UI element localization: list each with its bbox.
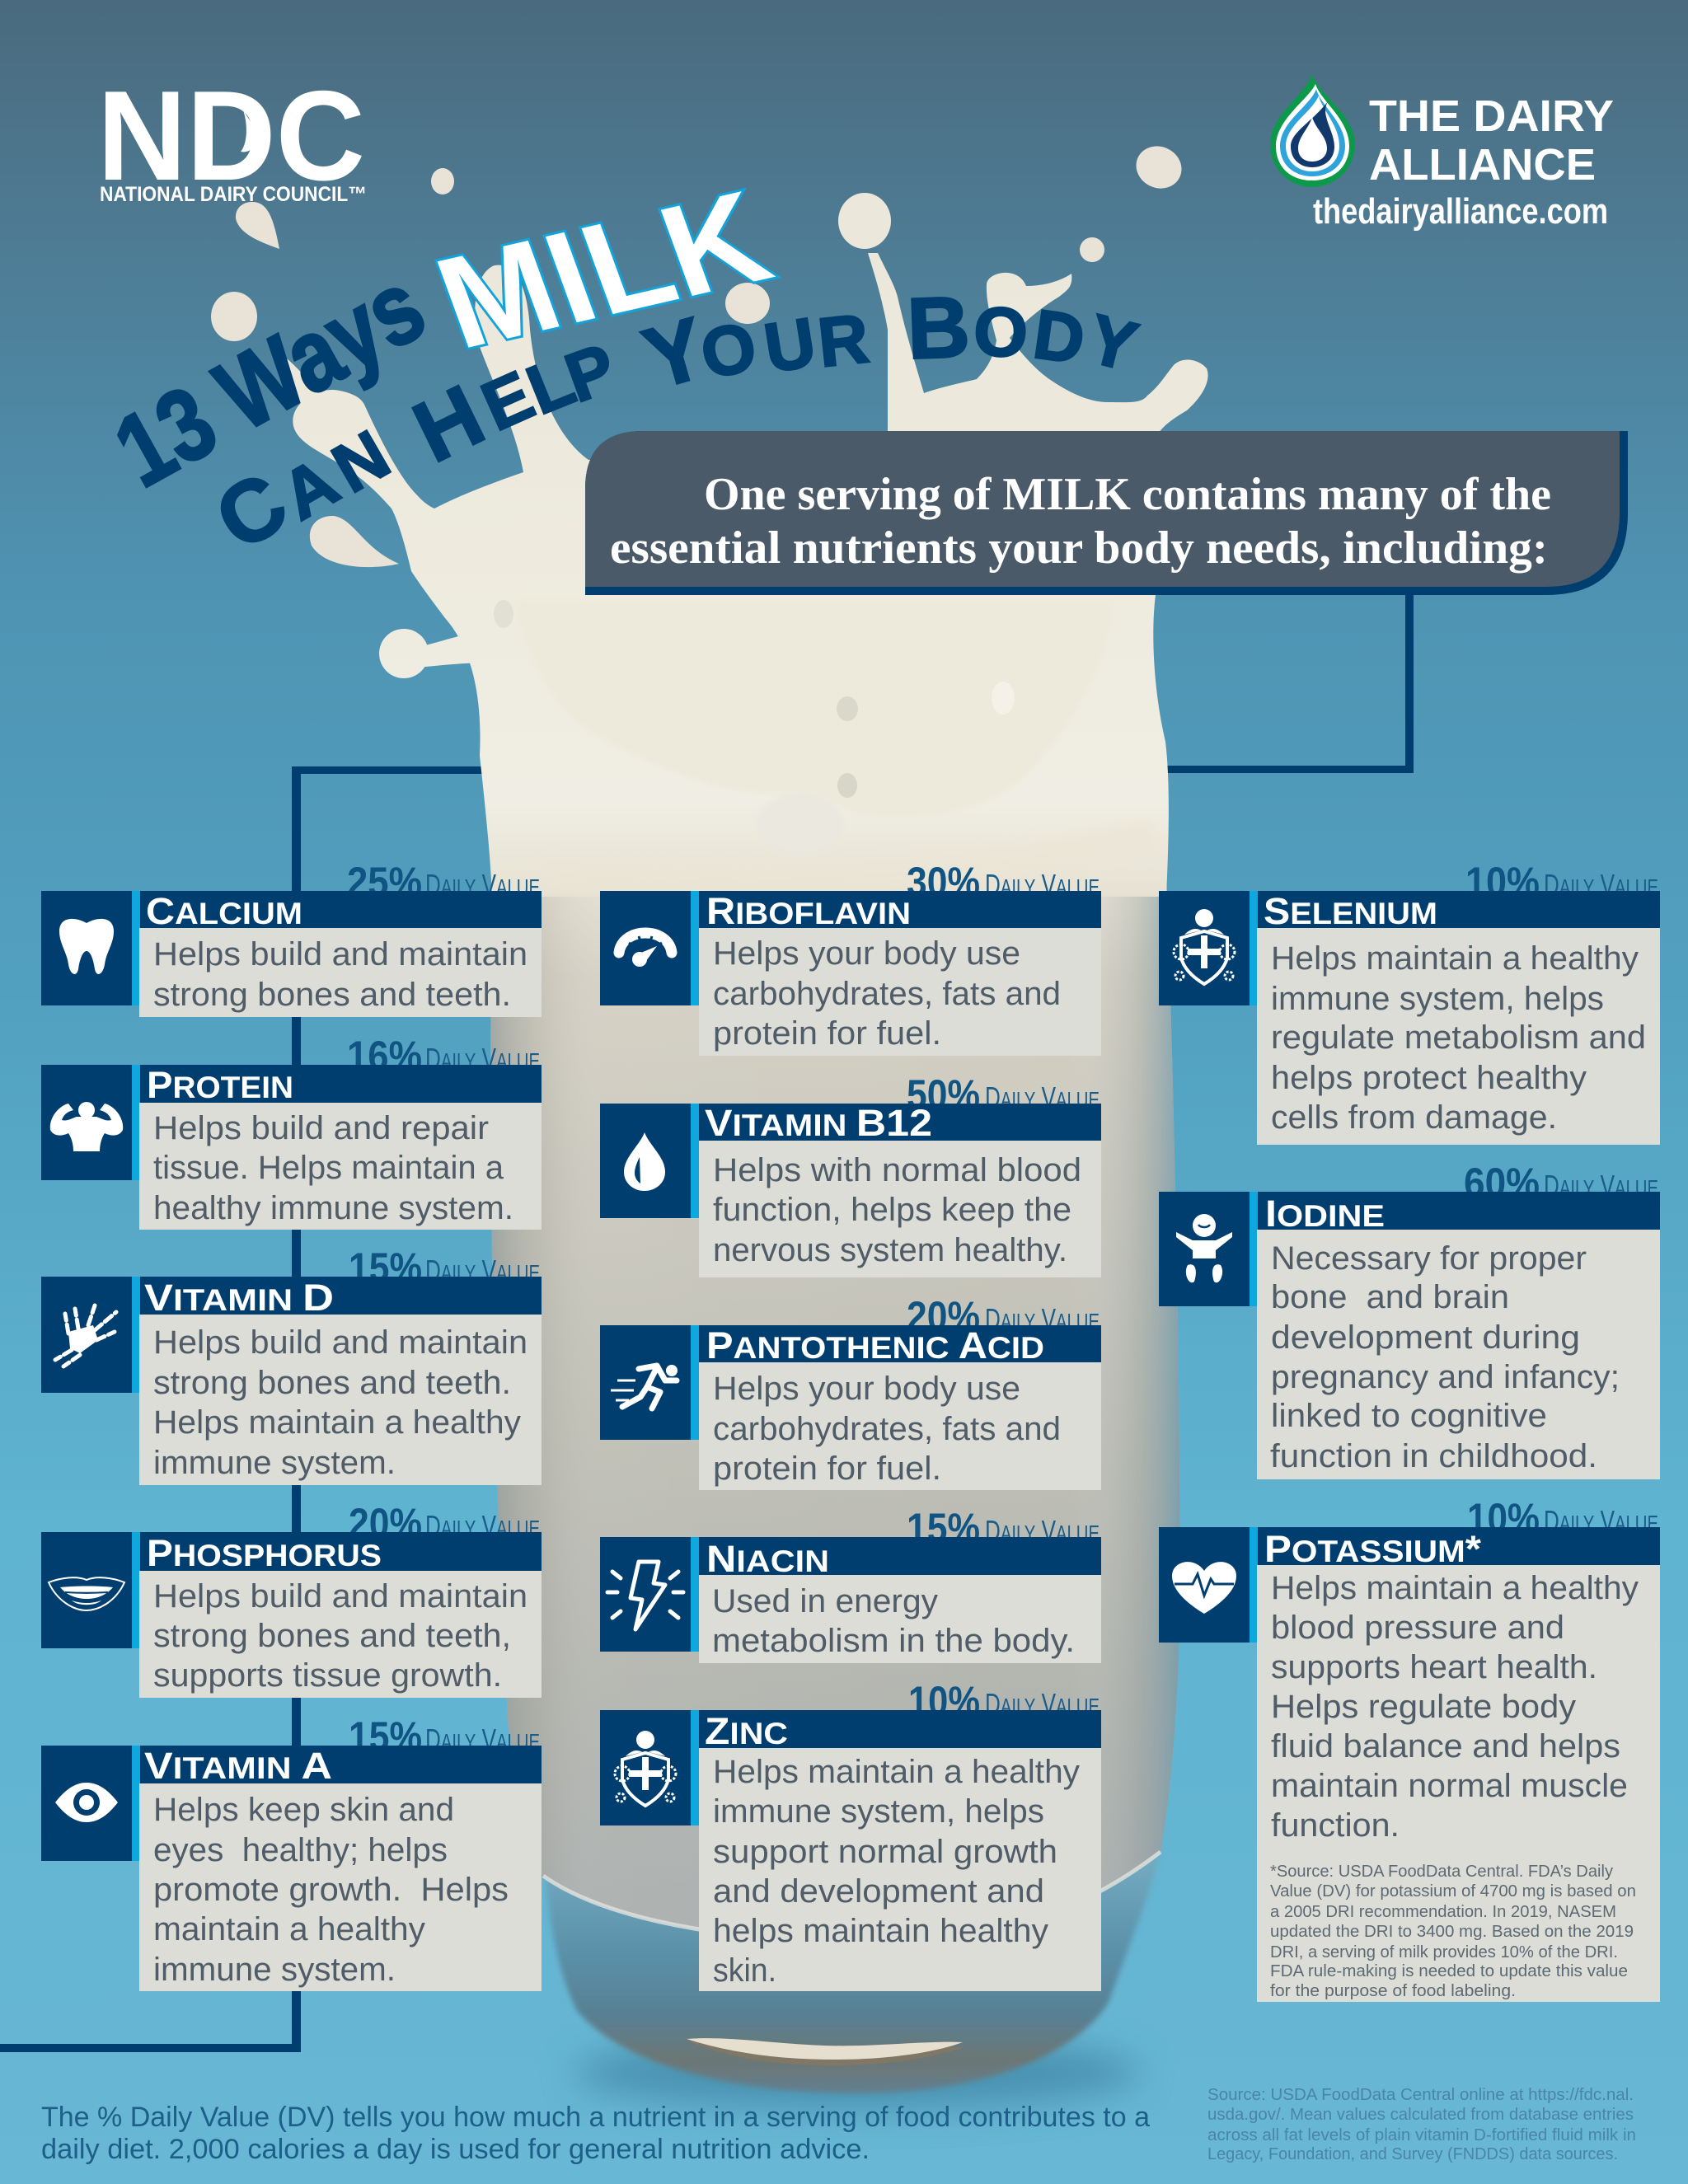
card: Calcium — [41, 859, 542, 1017]
card: Selenium: immune system, helps — [1271, 981, 1604, 1017]
card: Vitamin B12: function, helps keep the — [713, 1192, 1071, 1228]
card: Protein: PROTEIN — [147, 1064, 293, 1106]
card: Vitamin A: Helps keep skin and — [153, 1792, 454, 1828]
card: Calcium: strong bones and teeth. — [153, 977, 511, 1013]
card: Vitamin A: VITAMIN A — [144, 1745, 332, 1787]
footnote: updated the DRI to 3400 mg. Based on the 2019 — [1270, 1923, 1634, 1941]
card: Zinc: and development and — [713, 1873, 1044, 1910]
card: Vitamin A: immune system. — [153, 1952, 396, 1988]
connector lines — [0, 589, 1414, 2052]
milk surface — [515, 602, 1113, 818]
card: Iodine: development during — [1271, 1319, 1580, 1356]
card: Potassium: blood pressure and — [1271, 1610, 1564, 1646]
logo: The Dairy Alliance: ALLIANCE — [1369, 140, 1596, 190]
card: Vitamin A: maintain a healthy — [153, 1911, 425, 1947]
footnote: DRI, a serving of milk provides 10% of the DRI. — [1270, 1943, 1618, 1961]
card: Niacin: 15% — [907, 1505, 980, 1551]
card: Selenium: Helps maintain a healthy — [1271, 940, 1639, 977]
card: Vitamin A — [41, 1713, 542, 1991]
title: N — [320, 415, 425, 508]
card: Selenium: helps protect healthy — [1271, 1060, 1587, 1096]
card: Pantothenic Acid: PANTOTHENIC ACID — [706, 1324, 1044, 1366]
card: Zinc: DAILY VALUE — [985, 1687, 1100, 1721]
card: Vitamin B12: 50% — [907, 1071, 980, 1118]
title: U — [759, 302, 821, 387]
card: Vitamin B12: DAILY VALUE — [985, 1080, 1100, 1114]
title: A — [269, 443, 351, 535]
card: Calcium: 25% — [347, 859, 422, 905]
card: Protein — [41, 1033, 542, 1230]
title: R — [814, 299, 892, 382]
card: Selenium: 10% — [1465, 859, 1540, 905]
card: Riboflavin: carbohydrates, fats and — [713, 976, 1061, 1012]
title: H — [400, 367, 498, 481]
card: Vitamin B12: nervous system healthy. — [713, 1232, 1067, 1268]
card: Riboflavin: 30% — [907, 859, 980, 905]
card: Potassium: fluid balance and helps — [1271, 1728, 1620, 1765]
card: Pantothenic Acid: DAILY VALUE — [985, 1302, 1100, 1336]
milk droplets — [211, 139, 1189, 567]
title: O — [694, 307, 763, 394]
callout panel: essential nutrients your body needs, including: — [610, 523, 1548, 574]
card: Calcium: DAILY VALUE — [425, 868, 540, 902]
card: Protein: tissue. Helps maintain a — [153, 1150, 504, 1186]
card: Riboflavin: Helps your body use — [713, 935, 1020, 972]
icon: immune shield — [1174, 909, 1235, 984]
card: Iodine: 60% — [1464, 1160, 1540, 1206]
source note: Legacy, Foundation, and Survey (FNDDS) data sources. — [1207, 2145, 1618, 2163]
source note: Source: USDA FoodData Central online at https://fdc.nal. — [1207, 2086, 1634, 2104]
icon: eye — [55, 1783, 118, 1822]
glass of milk — [490, 874, 1180, 2110]
card: Vitamin A: promote growth. Helps — [153, 1872, 509, 1908]
title: E — [471, 356, 545, 445]
callout panel: One serving of MILK contains many of the — [704, 469, 1551, 520]
card: Potassium: Helps regulate body — [1271, 1689, 1576, 1725]
card: Phosphorus: Helps build and maintain — [153, 1578, 528, 1615]
card: Vitamin D: Helps build and maintain — [153, 1324, 528, 1361]
card: Phosphorus — [41, 1500, 542, 1698]
card: Potassium: Helps maintain a healthy — [1271, 1570, 1639, 1606]
icon: immune shield — [615, 1731, 676, 1806]
title: C — [199, 454, 303, 569]
daily value explanation: The % Daily Value (DV) tells you how much a nutrient in a serving of food contributes to a — [41, 2102, 1150, 2133]
card: Selenium: DAILY VALUE — [1544, 868, 1658, 902]
card: Riboflavin: protein for fuel. — [713, 1015, 941, 1052]
card: Selenium: cells from damage. — [1271, 1099, 1557, 1136]
icon: baby — [1176, 1214, 1232, 1282]
card: Iodine — [1159, 1160, 1660, 1479]
card: Selenium: regulate metabolism and — [1271, 1019, 1646, 1056]
card: Zinc — [600, 1678, 1101, 1991]
footnote: *Source: USDA FoodData Central. FDA’s Daily — [1270, 1863, 1613, 1881]
card: Zinc: skin. — [713, 1952, 776, 1989]
logo: National Dairy Council: NATIONAL DAIRY COUNCIL™ — [100, 183, 367, 206]
card: Calcium: Helps build and maintain — [153, 936, 528, 972]
card: Zinc: ZINC — [705, 1710, 788, 1752]
card: Potassium: function. — [1271, 1807, 1400, 1844]
card: Phosphorus: DAILY VALUE — [425, 1509, 540, 1543]
title — [97, 164, 1145, 569]
card: Pantothenic Acid: 20% — [907, 1293, 980, 1339]
icon: runner — [611, 1365, 678, 1408]
card: Iodine: pregnancy and infancy; — [1271, 1359, 1620, 1395]
card: Phosphorus: PHOSPHORUS — [147, 1532, 382, 1574]
milk splash crown — [277, 193, 1208, 897]
callout panel — [585, 431, 1628, 595]
title: L — [517, 341, 584, 429]
card: Niacin: Used in energy — [712, 1583, 938, 1619]
card: Potassium — [1159, 1495, 1660, 2002]
logo: National Dairy Council: NDC — [97, 64, 365, 207]
card: Phosphorus: supports tissue growth. — [153, 1657, 502, 1694]
card: Potassium: DAILY VALUE — [1544, 1504, 1658, 1538]
card: Zinc: helps maintain healthy — [713, 1913, 1048, 1949]
card: Selenium: SELENIUM — [1264, 890, 1437, 932]
card: Pantothenic Acid — [600, 1293, 1101, 1490]
card: Vitamin A: DAILY VALUE — [425, 1722, 540, 1756]
card: Vitamin D: 15% — [349, 1244, 422, 1291]
card: Iodine: bone and brain — [1271, 1279, 1509, 1315]
card: Protein: Helps build and repair — [153, 1110, 489, 1146]
title: D — [1029, 295, 1090, 378]
logo: The Dairy Alliance: thedairyalliance.com — [1313, 191, 1608, 232]
card: Vitamin A: eyes healthy; helps — [153, 1832, 448, 1868]
title: MILK — [420, 164, 787, 377]
card: Vitamin A: 15% — [349, 1713, 422, 1760]
card: Vitamin B12: Helps with normal blood — [713, 1152, 1081, 1188]
icon: tooth — [59, 919, 114, 974]
card: Niacin — [600, 1505, 1101, 1663]
source note — [1207, 2086, 1636, 2163]
footnote — [1270, 1863, 1636, 2000]
card: Niacin: NIACIN — [706, 1538, 829, 1580]
card: Pantothenic Acid: carbohydrates, fats and — [713, 1411, 1061, 1447]
card: Potassium: maintain normal muscle — [1271, 1768, 1628, 1804]
title: Y — [1081, 299, 1145, 386]
card: Niacin: DAILY VALUE — [985, 1514, 1100, 1548]
icon: smile — [49, 1577, 124, 1610]
card: Potassium: POTASSIUM * — [1264, 1528, 1482, 1570]
card: Zinc: 10% — [908, 1678, 980, 1724]
icon: blood drop — [624, 1132, 665, 1191]
card: Iodine: IODINE — [1265, 1193, 1385, 1235]
icon: gauge — [619, 933, 672, 967]
card: Protein: 16% — [347, 1033, 422, 1079]
card: Vitamin D: Helps maintain a healthy — [153, 1404, 521, 1441]
card: Niacin: metabolism in the body. — [712, 1623, 1075, 1659]
card: Riboflavin: DAILY VALUE — [985, 868, 1100, 902]
card: Phosphorus: 20% — [349, 1500, 422, 1546]
title: Y — [634, 299, 716, 408]
title: 13 Ways — [97, 249, 443, 509]
card: Potassium: 10% — [1467, 1495, 1540, 1541]
card: Iodine: DAILY VALUE — [1544, 1169, 1658, 1202]
card: Iodine: linked to cognitive — [1271, 1398, 1547, 1434]
card: Riboflavin: RIBOFLAVIN — [706, 890, 911, 932]
card: Vitamin D — [41, 1244, 542, 1485]
daily value explanation — [41, 2102, 1150, 2165]
card: Iodine: function in childhood. — [1270, 1438, 1597, 1474]
card: Zinc: support normal growth — [713, 1834, 1057, 1870]
card: Vitamin D: DAILY VALUE — [425, 1254, 540, 1287]
card: Calcium: CALCIUM — [146, 890, 302, 932]
card: Phosphorus: strong bones and teeth, — [153, 1618, 511, 1654]
card: Vitamin D: immune system. — [153, 1445, 396, 1481]
source note: usda.gov/. Mean values calculated from database entries — [1207, 2106, 1634, 2124]
card: Protein: DAILY VALUE — [425, 1042, 540, 1076]
footnote: FDA rule-making is needed to update this value — [1270, 1962, 1628, 1980]
icon: muscle torso — [50, 1102, 123, 1151]
footnote: for the purpose of food labeling. — [1270, 1982, 1516, 2000]
card: Vitamin B12 — [600, 1071, 1101, 1277]
icon: energy bolt — [607, 1562, 683, 1629]
card: Pantothenic Acid: protein for fuel. — [713, 1451, 941, 1487]
card: Protein: healthy immune system. — [153, 1190, 513, 1226]
daily value explanation: daily diet. 2,000 calories a day is used for general nutrition advice. — [41, 2134, 870, 2165]
logo: The Dairy Alliance — [1270, 74, 1614, 232]
card: Zinc: Helps maintain a healthy — [713, 1754, 1080, 1790]
card: Vitamin D: VITAMIN D — [144, 1277, 334, 1319]
card: Selenium — [1159, 859, 1660, 1145]
icon: heart with pulse — [1172, 1562, 1236, 1614]
footnote: Value (DV) for potassium of 4700 mg is based on — [1270, 1882, 1636, 1900]
title: P — [556, 329, 645, 417]
card: Zinc: immune system, helps — [713, 1793, 1044, 1830]
logo: The Dairy Alliance: THE DAIRY — [1369, 91, 1614, 141]
card: Pantothenic Acid: Helps your body use — [713, 1371, 1020, 1407]
title: B — [906, 279, 972, 377]
icon: hand bones — [55, 1305, 116, 1366]
card: Riboflavin — [600, 859, 1101, 1056]
card: Vitamin D: strong bones and teeth. — [153, 1365, 511, 1401]
card: Iodine: Necessary for proper — [1271, 1240, 1587, 1277]
card: Potassium: supports heart health. — [1271, 1649, 1597, 1685]
source note: across all fat levels of plain vitamin D-fortified fluid milk in — [1207, 2126, 1636, 2144]
footnote: a 2005 DRI recommendation. In 2019, NASEM — [1270, 1903, 1616, 1921]
title: O — [972, 292, 1029, 372]
card: Vitamin B12: VITAMIN B12 — [705, 1102, 932, 1144]
